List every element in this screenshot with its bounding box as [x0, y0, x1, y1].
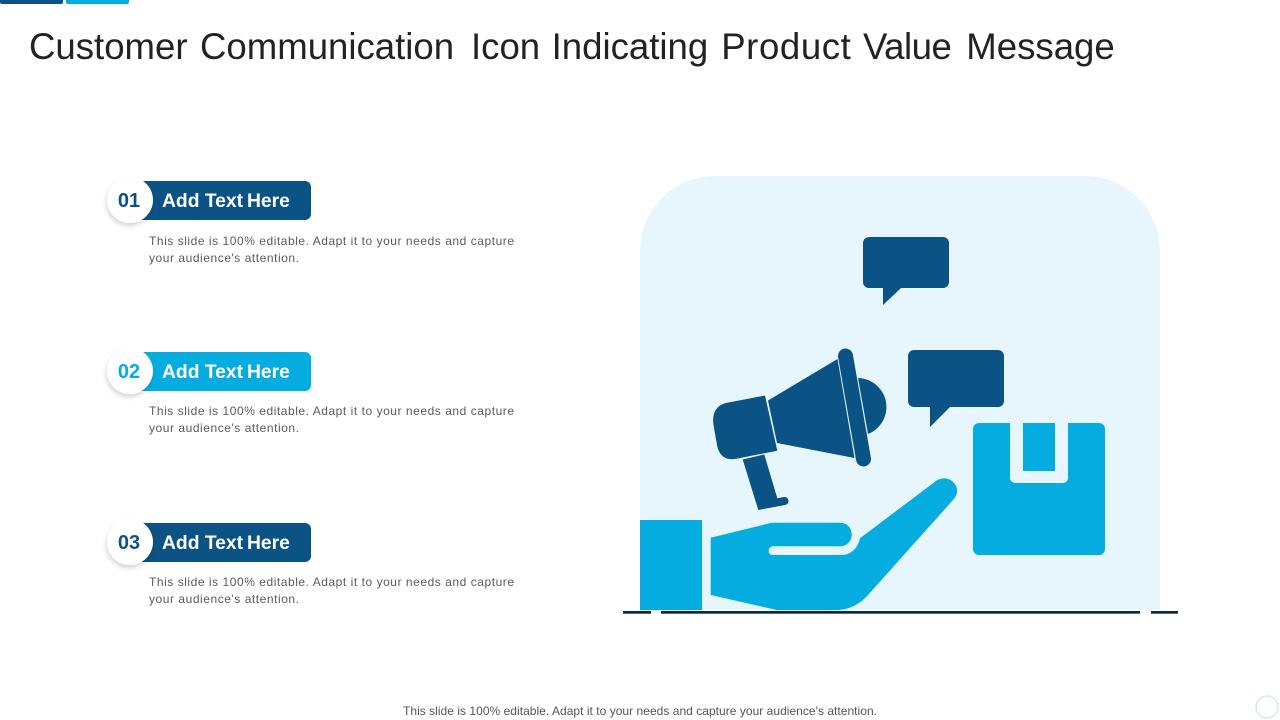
title: Indicating [552, 26, 708, 67]
number badge 03 [107, 519, 153, 565]
body text 01: your audience's attention. [149, 251, 299, 265]
item 02 [107, 348, 514, 435]
number 01: 01 [118, 190, 140, 212]
icon: hand cuff [640, 520, 702, 610]
body text 01: This slide is 100% editable. Adapt it to your needs and capture [149, 234, 514, 248]
illustration panel [640, 176, 1160, 610]
label bar 03 [130, 523, 311, 562]
body text 03: This slide is 100% editable. Adapt it to your needs and capture [149, 575, 514, 589]
number 02: 02 [118, 361, 140, 383]
footer note: This slide is 100% editable. Adapt it to your needs and capture your audience's attention. [403, 704, 877, 718]
icon: speech bubble top [863, 237, 949, 305]
icon: speech bubble right [908, 350, 1004, 427]
body text 02: This slide is 100% editable. Adapt it to your needs and capture [149, 404, 514, 418]
title: Communication [200, 26, 454, 67]
corner ring [1256, 696, 1278, 718]
title: Value [863, 26, 951, 67]
body text 02 [149, 404, 514, 435]
label bar 01 [130, 181, 311, 220]
number badge 01 [107, 177, 153, 223]
title: Message [966, 26, 1115, 67]
top accent bars [0, 0, 129, 4]
ground line [623, 611, 1178, 614]
icon: product box [973, 423, 1105, 555]
icon: megaphone [713, 356, 886, 510]
number 03: 03 [118, 532, 140, 554]
body text 02: your audience's attention. [149, 421, 299, 435]
heading 02: Here [247, 362, 290, 383]
heading 03: Here [247, 533, 290, 554]
heading 02: Add Text [162, 362, 243, 383]
heading 03: Add Text [162, 533, 243, 554]
title: Product [721, 26, 851, 67]
body text 01 [149, 234, 514, 265]
heading 01: Here [247, 191, 290, 212]
item 03 [107, 519, 514, 606]
heading 01: Add Text [162, 191, 243, 212]
body text 03: your audience's attention. [149, 592, 299, 606]
title: Icon [471, 26, 540, 67]
icon: open hand [711, 478, 957, 610]
item 01 [107, 177, 514, 265]
label bar 02 [130, 352, 311, 391]
number badge 02 [107, 348, 153, 394]
body text 03 [149, 575, 514, 606]
title: Customer [29, 26, 188, 67]
